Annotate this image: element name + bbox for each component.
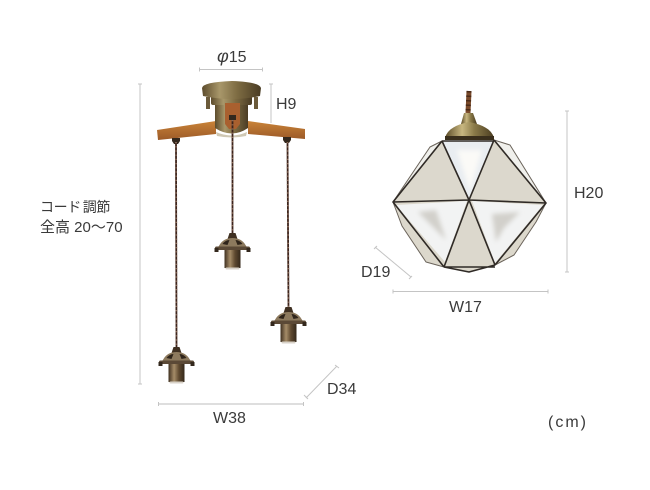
glass cloud shading [418, 210, 520, 242]
wooden arm left [157, 121, 216, 140]
dimension: lamp depth 19 [361, 246, 412, 281]
dimension: diameter 15 [200, 46, 262, 72]
dimension: lamp height 20: H20 [574, 185, 603, 202]
cord mounts [172, 115, 291, 144]
brass collar [211, 95, 252, 105]
brass canopy [202, 81, 261, 99]
socket: left [158, 347, 194, 384]
socket: right [270, 307, 306, 344]
twisted cord [468, 91, 469, 113]
brass cap [445, 122, 494, 138]
dimension: lamp width 17: W17 [449, 299, 482, 316]
unit label: (cm) [548, 414, 588, 431]
canopy screws [206, 97, 258, 109]
label: cord adjustment: 全高 20～70 [40, 219, 123, 236]
dimension: lamp height 20 [565, 111, 603, 272]
wooden block [225, 103, 240, 129]
textured panels [397, 145, 542, 265]
dimension: lamp depth 19: D19 [361, 264, 390, 281]
clear lower-left panel [396, 201, 467, 262]
dimension: lamp width 17 [393, 290, 548, 316]
cords [176, 120, 288, 348]
brass stem [215, 104, 248, 134]
dimension: canopy height 9: H9 [276, 96, 297, 113]
glass pendant lamp [393, 91, 546, 272]
side panels upper [393, 140, 546, 203]
outer facets [393, 140, 546, 267]
bright centre glow [457, 150, 482, 192]
clear lower-right panel [472, 201, 543, 263]
dimension: width 38 [158, 402, 304, 427]
wooden arm right [248, 121, 305, 139]
brass neck [461, 113, 477, 124]
dimension: cord height [138, 84, 142, 384]
clear top panel [442, 141, 494, 198]
dimension: depth 34: D34 [327, 381, 356, 398]
label: cord adjustment [40, 199, 123, 236]
ceiling fixture [157, 81, 305, 144]
label: cord adjustment: コード 調節 [40, 199, 110, 215]
dimension: depth 34 [304, 365, 356, 399]
dimension: diameter 15: φ15 [217, 46, 247, 66]
dimension: canopy height 9 [269, 84, 297, 123]
dimension: width 38: W38 [213, 410, 246, 427]
lead lines [393, 140, 546, 272]
socket: centre [214, 233, 250, 270]
glass body [393, 140, 546, 272]
